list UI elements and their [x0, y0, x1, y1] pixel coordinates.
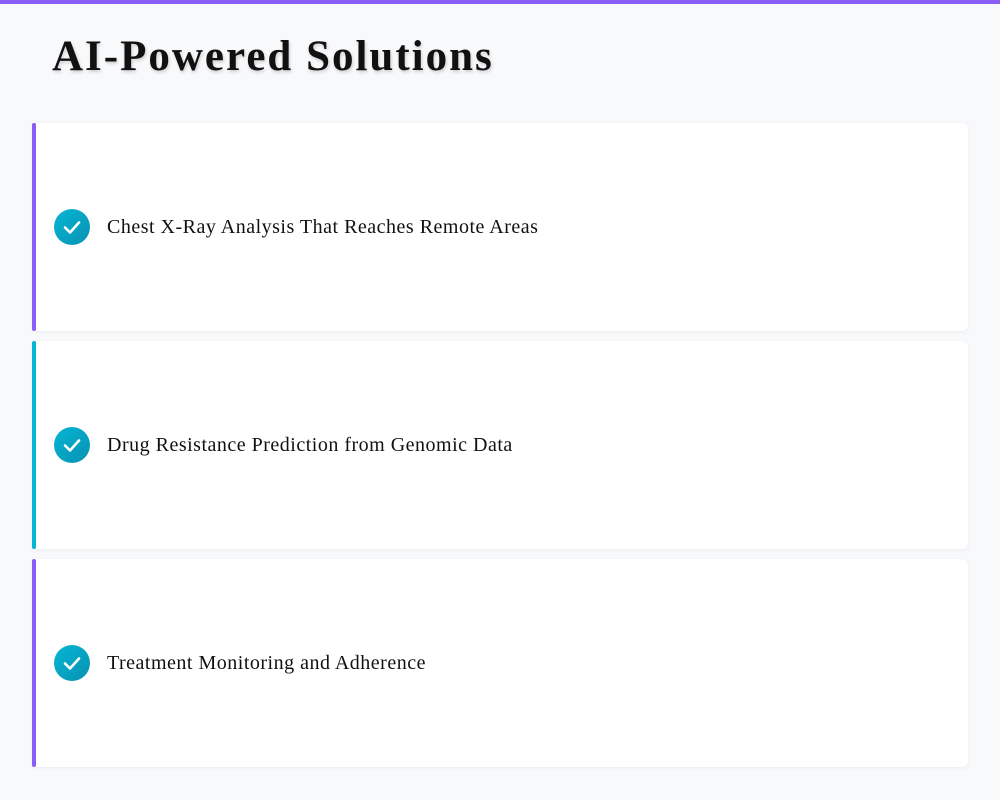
- text: Treatment Monitoring and Adherence: [107, 652, 426, 674]
- icon: check: [54, 209, 90, 245]
- title: AI-Powered Solutions: [52, 33, 494, 80]
- text: Chest X-Ray Analysis That Reaches Remote Areas: [107, 216, 538, 238]
- panel: chest x-ray: [32, 123, 968, 331]
- panel: treatment monitoring: [32, 559, 968, 767]
- text: Drug Resistance Prediction from Genomic Data: [107, 434, 513, 456]
- icon: check: [54, 645, 90, 681]
- icon: check: [54, 427, 90, 463]
- panel: drug resistance: [32, 341, 968, 549]
